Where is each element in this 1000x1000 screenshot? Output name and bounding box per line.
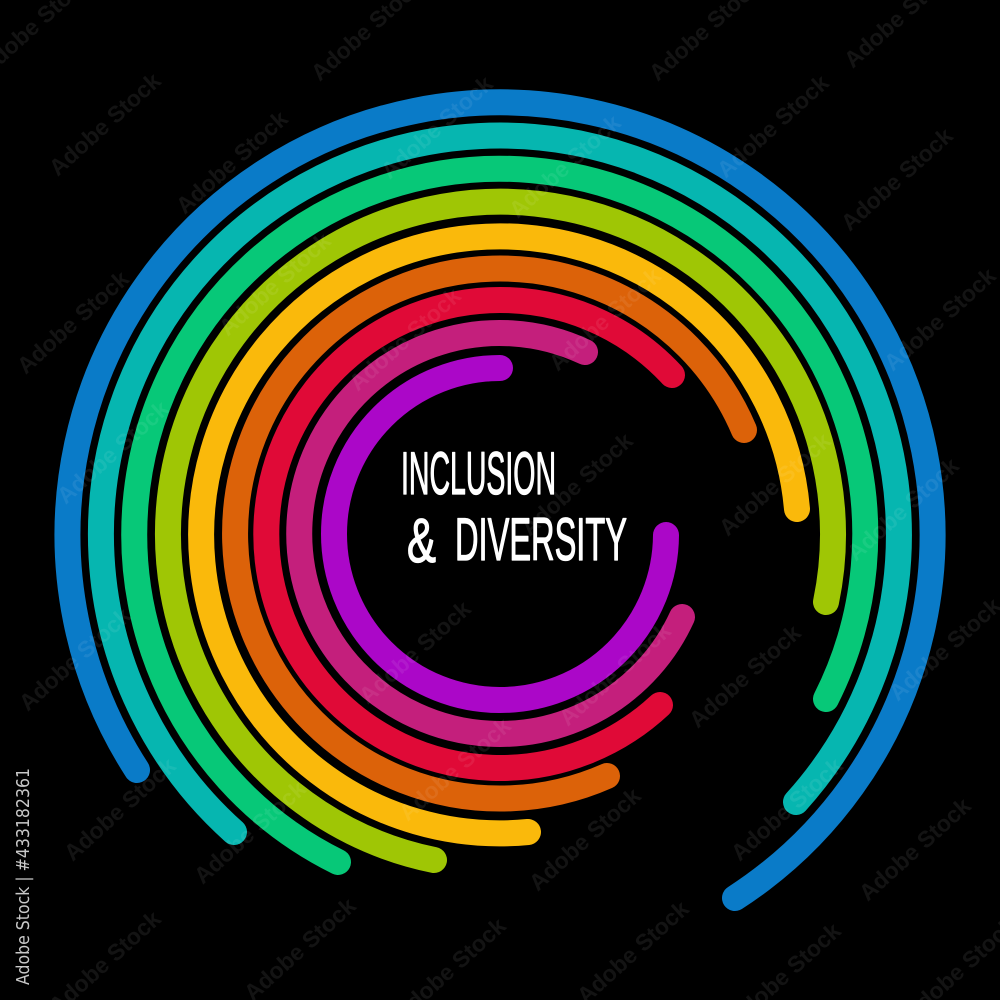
arc: teal: [101, 136, 899, 832]
watermarks: Adobe Stock: [14, 602, 136, 716]
watermarks: Adobe Stock: [394, 712, 516, 826]
watermarks: Adobe Stock: [714, 427, 836, 541]
watermarks: Adobe Stock: [726, 752, 848, 866]
title line 2: DIVERSITY: [455, 506, 627, 573]
watermarks: Adobe Stock: [344, 282, 466, 396]
title: INCLUSION: [401, 440, 556, 507]
arc: magenta: [299, 333, 682, 734]
watermarks: Adobe Stock: [554, 617, 676, 731]
watermarks: Adobe Stock: [712, 69, 834, 183]
watermarks: Adobe Stock: [59, 752, 181, 866]
watermarks: Adobe Stock: [376, 70, 498, 184]
watermarks: Adobe Stock: [836, 122, 958, 236]
watermarks: Adobe Stock: [879, 262, 1000, 376]
arc: yellow: [201, 236, 797, 833]
watermarks: Adobe Stock: [189, 775, 311, 889]
arc: red: [266, 300, 672, 768]
watermarks: Adobe Stock: [44, 67, 166, 181]
spiral of concentric rainbow arcs: [68, 102, 933, 898]
watermarks: Adobe Stock: [544, 262, 666, 376]
arc: orange: [235, 269, 744, 799]
watermarks: Adobe Stock: [52, 395, 174, 509]
watermarks: Adobe Stock: [524, 782, 646, 896]
watermarks: Adobe Stock: [854, 792, 976, 906]
watermarks: Adobe Stock: [842, 452, 964, 566]
watermarks: Adobe Stock: [12, 265, 134, 379]
arc: green: [134, 169, 865, 862]
watermarks: Adobe Stock: [516, 427, 638, 541]
arc: blue: [68, 102, 933, 898]
watermarks: Adobe Stock: [354, 595, 476, 709]
watermarks: Adobe Stock: [684, 619, 806, 733]
stock id label: Adobe Stock | #433182361: [13, 768, 34, 985]
arc: purple: [334, 368, 666, 700]
title ampersand: &: [407, 507, 436, 576]
watermarks: Adobe Stock: [504, 109, 626, 223]
watermarks: Adobe Stock: [214, 227, 336, 341]
arc: lime: [168, 202, 833, 860]
title: [401, 440, 627, 576]
watermarks: Adobe Stock: [171, 105, 293, 219]
